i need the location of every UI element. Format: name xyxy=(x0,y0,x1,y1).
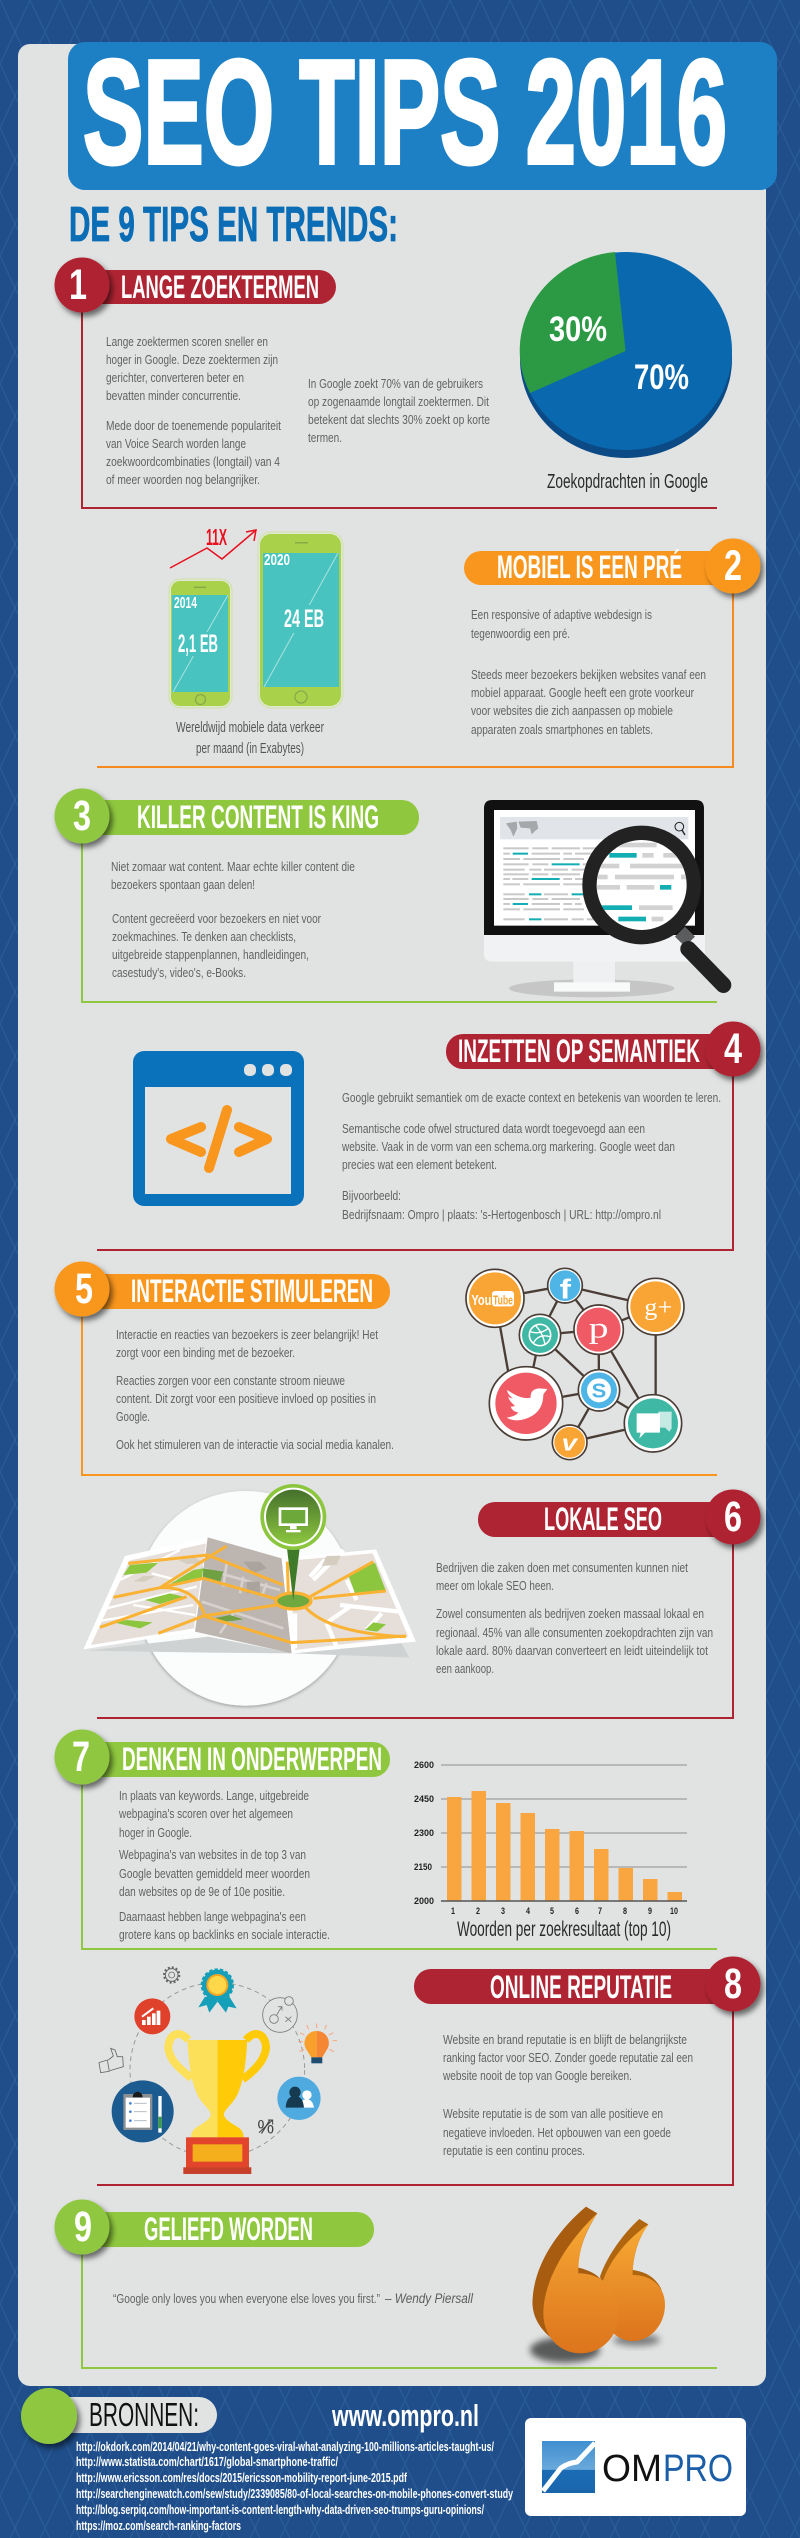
text block: tip 4: precies wat een element betekent. xyxy=(342,1157,497,1172)
icon: growth arrow xyxy=(170,524,256,568)
source links: https://moz.com/search-ranking-factors xyxy=(76,2518,241,2533)
bar chart xyxy=(414,1760,687,1941)
icon: tactics xyxy=(263,1997,297,2032)
text block: tip 5: Interactie en reacties van bezoekers is zeer belangrijk! Het xyxy=(116,1327,378,1342)
icon: monitor with magnifier xyxy=(484,800,723,997)
icon: phone 2020 xyxy=(258,532,343,708)
text block: tip 6: Zowel consumenten als bedrijven zoeken massaal lokaal en xyxy=(436,1606,704,1621)
text block: tip 7: Webpagina's van websites in de top 3 van xyxy=(119,1847,306,1862)
bar chart: 10 xyxy=(670,1906,678,1916)
heading: tip 2 xyxy=(464,538,760,594)
text block: tip 2: voor websites die zich aanpassen op mobiele xyxy=(471,703,673,718)
panel: tip 6 xyxy=(83,1484,760,1718)
text block: tip 1 left: Lange zoektermen scoren sneller en xyxy=(106,334,268,349)
icon: growth arrow: 11X xyxy=(206,524,227,550)
bar chart: 5 xyxy=(550,1906,554,1916)
text block: tip 4: website. Vaak in de vorm van een schema.org markering. Google weet dan xyxy=(341,1139,675,1154)
source links: http://okdork.com/2014/04/21/why-content-goes-viral-what-analyzing-100-millions-articles-taught-us/ xyxy=(76,2439,494,2454)
text block: tip 7: dan websites op de 9e of 10e positie. xyxy=(119,1884,285,1899)
icon: quotation marks xyxy=(530,2207,665,2363)
icon: light bulb xyxy=(298,2023,337,2063)
text block: tip 7: webpagina's scoren over het algemeen xyxy=(118,1806,293,1821)
icon: youtube: You xyxy=(471,1293,491,1309)
quote text: “Google only loves you when everyone else loves you first.” xyxy=(113,2291,380,2306)
icon: phone 2020: 2020 xyxy=(264,552,290,569)
heading: tip 1: LANGE ZOEKTERMEN xyxy=(121,269,319,305)
source links: http://www.statista.com/chart/1617/global-smartphone-traffic/ xyxy=(76,2454,338,2469)
icon: pinterest xyxy=(574,1305,623,1354)
text block: tip 7: grotere kans op backlinks en sociale interactie. xyxy=(119,1927,330,1942)
heading: tip 7 xyxy=(54,1730,390,1784)
icon: trophy xyxy=(168,2034,266,2174)
chart: phones xyxy=(169,524,343,757)
bar chart: 2150 xyxy=(414,1862,432,1872)
text block: tip 6: lokale aard. 80% daarvan converteert en leidt uiteindelijk tot xyxy=(436,1643,708,1658)
bar chart: 4 xyxy=(526,1906,530,1916)
icon: clipboard xyxy=(112,2080,174,2142)
heading: tip 8 xyxy=(414,1956,760,2012)
icon: vimeo xyxy=(552,1425,587,1460)
icon: social network graph xyxy=(466,1268,684,1460)
text block: tip 2: mobiel apparaat. Google heeft een grote voorkeur xyxy=(471,685,695,700)
quote text: – Wendy Piersall xyxy=(384,2291,474,2306)
icon: dribbble xyxy=(519,1314,561,1356)
text block: tip 1 left: bevatten minder concurrentie. xyxy=(106,388,241,403)
source links: http://www.ericsson.com/res/docs/2015/ericsson-mobility-report-june-2015.pdf xyxy=(76,2470,407,2485)
icon: code window xyxy=(133,1051,304,1206)
icon: phone 2014 xyxy=(169,579,232,708)
icon: location pin xyxy=(260,1484,326,1601)
panel: tip 1 xyxy=(54,252,732,508)
icon: youtube xyxy=(466,1269,524,1327)
bar chart: 3 xyxy=(501,1906,505,1916)
panel: tip 4 xyxy=(97,1022,760,1250)
text block: tip 6 xyxy=(436,1560,713,1676)
text block: tip 3: bezoekers spontaan gaan delen! xyxy=(111,877,255,892)
pie chart xyxy=(520,252,732,493)
text block: tip 8: website nooit de top van Google bereiken. xyxy=(442,2068,632,2083)
heading: tip 5: 5 xyxy=(75,1265,93,1313)
bar chart: 8 xyxy=(623,1906,627,1916)
caption: phones xyxy=(176,719,324,757)
text block: tip 1 right: op zogenaamde longtail zoektermen. Dit xyxy=(308,394,489,409)
text block: tip 1 right xyxy=(308,376,490,445)
icon: people xyxy=(277,2077,321,2120)
icon: map with pin xyxy=(83,1484,416,1706)
pie chart: 70% xyxy=(634,358,689,397)
text block: tip 4: Semantische code ofwel structured data wordt toegevoegd aan een xyxy=(342,1121,645,1136)
text block: tip 1 left: of meer woorden nog belangrijker. xyxy=(106,472,260,487)
bar chart: 9 xyxy=(648,1906,652,1916)
bar chart: 2450 xyxy=(414,1794,434,1804)
text block: tip 1 left xyxy=(106,334,281,487)
text block: tip 3: Niet zomaar wat content. Maar echte killer content die xyxy=(111,859,355,874)
text block: tip 1 left: Mede door de toenemende populariteit xyxy=(106,418,281,433)
heading: tip 7: DENKEN IN ONDERWERPEN xyxy=(122,1741,382,1777)
heading: tip 9 xyxy=(54,2200,374,2254)
text block: tip 3: casestudy's, video's, e-Books. xyxy=(112,965,246,980)
icon: medal xyxy=(198,1970,237,2013)
heading: tip 7: 7 xyxy=(72,1733,90,1781)
text block: tip 2: apparaten zoals smartphones en tablets. xyxy=(471,722,653,737)
text block: tip 2 xyxy=(471,607,706,737)
icon: chat xyxy=(624,1395,682,1452)
icon: twitter xyxy=(489,1367,563,1440)
text block: tip 5: Reacties zorgen voor een constante stroom nieuwe xyxy=(116,1373,345,1388)
icon: thumbs up xyxy=(99,2048,123,2073)
text block: tip 7 xyxy=(118,1788,330,1942)
text block: tip 8 xyxy=(442,2032,693,2158)
icon: phone 2014: 2014 xyxy=(174,595,197,612)
text block: tip 2: tegenwoordig een pré. xyxy=(471,626,570,641)
text block: tip 7: hoger in Google. xyxy=(119,1825,192,1840)
website url: www.ompro.nl xyxy=(331,2398,479,2433)
text block: tip 7: Daarnaast hebben lange webpagina's een xyxy=(119,1909,306,1924)
text block: tip 4: Bedrijfsnaam: Ompro | plaats: 's-Hertogenbosch | URL: http://ompro.nl xyxy=(342,1207,661,1222)
heading: tip 9: GELIEFD WORDEN xyxy=(144,2211,313,2247)
icon: google plus xyxy=(627,1278,684,1335)
caption: phones: Wereldwijd mobiele data verkeer xyxy=(176,719,324,736)
text block: tip 8: Website reputatie is de som van alle positieve en xyxy=(443,2106,663,2121)
text block: tip 5: Google. xyxy=(116,1409,150,1424)
heading: tip 9: 9 xyxy=(74,2203,92,2251)
text block: tip 1 right: betekent dat slechts 30% zoekt op korte xyxy=(308,412,490,427)
logo: ompro: OM xyxy=(602,2448,662,2490)
heading: tip 2: 2 xyxy=(724,542,742,590)
text block: tip 2: Steeds meer bezoekers bekijken websites vanaf een xyxy=(471,667,706,682)
text block: tip 6: Bedrijven die zaken doen met consumenten kunnen niet xyxy=(436,1560,688,1575)
text block: tip 3: Content gecreëerd voor bezoekers en niet voor xyxy=(112,911,322,926)
text block: tip 4 xyxy=(341,1090,721,1222)
text block: tip 5 xyxy=(116,1327,394,1452)
text block: tip 3: uitgebreide stappenplannen, handleidingen, xyxy=(112,947,309,962)
pie chart: 30% xyxy=(549,310,607,349)
icon: gear xyxy=(164,1967,179,1983)
bar chart: 7 xyxy=(598,1906,602,1916)
text block: tip 1 left: gerichter, converteren beter en xyxy=(106,370,244,385)
panel: tip 5 xyxy=(54,1262,717,1475)
heading: tip 4: 4 xyxy=(724,1025,742,1073)
heading: tip 6 xyxy=(478,1490,760,1544)
caption: phones: per maand (in Exabytes) xyxy=(196,740,304,757)
heading: tip 1 xyxy=(54,258,336,312)
text block: tip 5: content. Dit zorgt voor een positieve invloed op posities in xyxy=(116,1391,376,1406)
heading: tip 3 xyxy=(54,788,419,844)
icon: growth chart xyxy=(134,1998,170,2034)
icon: facebook: f xyxy=(560,1273,572,1304)
panel: tip 7 xyxy=(54,1730,717,1949)
panel: tip 2 xyxy=(97,524,760,767)
sources heading: BRONNEN: xyxy=(89,2396,199,2433)
panel: tip 3 xyxy=(54,788,723,1002)
text block: tip 6: meer om lokale SEO heen. xyxy=(436,1578,554,1593)
text block: tip 8: reputatie is een continu proces. xyxy=(443,2143,585,2158)
heading: tip 5: INTERACTIE STIMULEREN xyxy=(131,1273,373,1309)
icon: percent: % xyxy=(257,2118,274,2139)
subheading: DE 9 TIPS EN TRENDS: xyxy=(69,198,398,252)
text block: tip 6: een aankoop. xyxy=(436,1661,494,1676)
text block: tip 1 right: termen. xyxy=(308,430,342,445)
bar chart: 2600 xyxy=(414,1760,434,1770)
text block: tip 8: negatieve invloeden. Het opbouwen van een goede xyxy=(443,2125,671,2140)
icon: skype xyxy=(578,1370,620,1411)
pie chart: Zoekopdrachten in Google xyxy=(547,471,708,493)
text block: tip 3 xyxy=(111,859,355,980)
text block: tip 8: Website en brand reputatie is en blijft de belangrijkste xyxy=(443,2032,687,2047)
bar chart: 1 xyxy=(451,1906,455,1916)
text block: tip 5: zorgt voor een binding met de bezoeker. xyxy=(116,1345,295,1360)
logo: ompro: PRO xyxy=(663,2448,733,2490)
text block: tip 6: regionaal. 45% van alle consumenten zoekopdrachten zijn van xyxy=(436,1625,713,1640)
icon: phone 2020: 24 EB xyxy=(284,605,324,633)
bar chart: 6 xyxy=(575,1906,579,1916)
text block: tip 8: ranking factor voor SEO. Zonder goede reputatie zal een xyxy=(443,2050,693,2065)
bar chart: Woorden per zoekresultaat (top 10) xyxy=(457,1918,671,1941)
icon: youtube: Tube xyxy=(493,1293,513,1307)
source links: http://blog.serpiq.com/how-important-is-content-length-why-data-driven-seo-trumps-guru-opinions/ xyxy=(76,2502,484,2517)
text block: tip 5: Ook het stimuleren van de interactie via social media kanalen. xyxy=(116,1437,394,1452)
heading: tip 2: MOBIEL IS EEN PRÉ xyxy=(497,549,682,585)
text block: tip 4: Bijvoorbeeld: xyxy=(342,1188,401,1203)
panel: tip 8 xyxy=(97,1956,760,2185)
source links xyxy=(76,2439,514,2533)
heading: tip 3: 3 xyxy=(73,792,91,840)
heading: tip 4 xyxy=(446,1022,760,1076)
bar chart: 2 xyxy=(476,1906,480,1916)
icon: facebook xyxy=(548,1268,582,1304)
heading: tip 6: 6 xyxy=(724,1493,742,1541)
text block: tip 1 left: hoger in Google. Deze zoektermen zijn xyxy=(106,352,278,367)
icon: vimeo: v xyxy=(562,1430,579,1455)
text block: tip 2: Een responsive of adaptive webdesign is xyxy=(471,607,652,622)
text block: tip 1 right: In Google zoekt 70% van de gebruikers xyxy=(308,376,483,391)
heading: tip 5 xyxy=(54,1262,390,1316)
icon: google plus: g+ xyxy=(644,1294,672,1321)
heading: tip 3: KILLER CONTENT IS KING xyxy=(137,799,379,835)
text block: tip 7: In plaats van keywords. Lange, uitgebreide xyxy=(119,1788,309,1803)
text block: tip 1 left: zoekwoordcombinaties (longtail) van 4 xyxy=(106,454,280,469)
text block: tip 1 left: van Voice Search worden lange xyxy=(106,436,246,451)
logo: ompro xyxy=(525,2418,746,2516)
bar chart: 2000 xyxy=(414,1896,434,1906)
icon: skype: S xyxy=(592,1380,606,1403)
source links: http://searchenginewatch.com/sew/study/2339085/80-of-local-searches-on-mobile-phones-convert-study xyxy=(76,2486,514,2501)
text block: tip 3: zoekmachines. Te denken aan checklists, xyxy=(112,929,296,944)
bar chart: 2300 xyxy=(414,1828,434,1838)
heading: tip 8: ONLINE REPUTATIE xyxy=(490,1969,672,2005)
heading: tip 6: LOKALE SEO xyxy=(544,1501,662,1537)
icon: pinterest: p xyxy=(589,1312,609,1345)
panel: tip 9 xyxy=(54,2200,717,2368)
heading: tip 8: 8 xyxy=(724,1960,742,2008)
heading: tip 1: 1 xyxy=(69,261,87,309)
sources heading xyxy=(21,2388,217,2444)
icon: phone 2014: 2,1 EB xyxy=(178,630,218,658)
icon: trophy with reputation icons xyxy=(99,1967,337,2174)
text block: tip 7: Google bevatten gemiddeld meer woorden xyxy=(119,1866,310,1881)
